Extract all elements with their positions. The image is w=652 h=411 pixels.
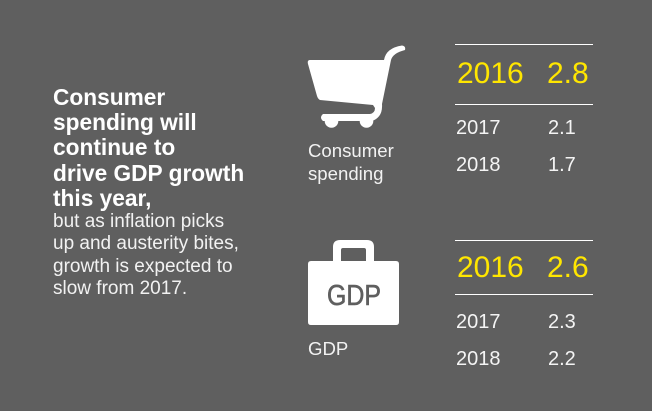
2018 consumer figures: [456, 154, 576, 176]
icon: shopping cart: [308, 46, 406, 128]
2016 GDP figures: 2016: [457, 251, 524, 284]
2017 consumer figures: 2017: [456, 117, 500, 139]
heading: [53, 84, 244, 211]
body text: but as inflation picks: [53, 211, 224, 232]
2016 consumer figures: [457, 57, 589, 90]
body text: [53, 211, 239, 299]
2016 GDP figures: 2.6: [547, 251, 589, 284]
label: consumer spending: [308, 140, 394, 184]
body text: slow from 2017.: [53, 278, 187, 299]
2016 consumer figures: 2016: [457, 57, 524, 90]
heading: this year,: [53, 185, 151, 211]
2017 consumer figures: [456, 117, 576, 139]
2018 GDP figures: [456, 348, 576, 370]
heading: continue to: [53, 134, 175, 160]
body text: up and austerity bites,: [53, 233, 239, 254]
2016 GDP figures: [457, 251, 589, 284]
2017 GDP figures: 2.3: [548, 311, 576, 333]
2017 GDP figures: 2017: [456, 311, 500, 333]
label: GDP: GDP: [308, 338, 348, 359]
icon: GDP briefcase: [308, 240, 399, 325]
label: consumer spending: spending: [308, 162, 383, 184]
2017 GDP figures: [456, 311, 576, 333]
icon: GDP briefcase: GDP: [327, 280, 381, 312]
2018 GDP figures: 2018: [456, 348, 500, 370]
heading: Consumer: [53, 84, 165, 110]
2018 consumer figures: 1.7: [548, 154, 576, 176]
2018 consumer figures: 2018: [456, 154, 500, 176]
2017 consumer figures: 2.1: [548, 117, 576, 139]
table: consumer spending: [455, 44, 593, 176]
table: GDP: [455, 240, 593, 370]
body text: growth is expected to: [53, 256, 233, 277]
heading: spending will: [53, 109, 197, 135]
2016 consumer figures: 2.8: [547, 57, 589, 90]
text block: summary: [53, 84, 244, 299]
label: consumer spending: Consumer: [308, 140, 394, 161]
heading: drive GDP growth: [53, 160, 244, 186]
2018 GDP figures: 2.2: [548, 348, 576, 370]
